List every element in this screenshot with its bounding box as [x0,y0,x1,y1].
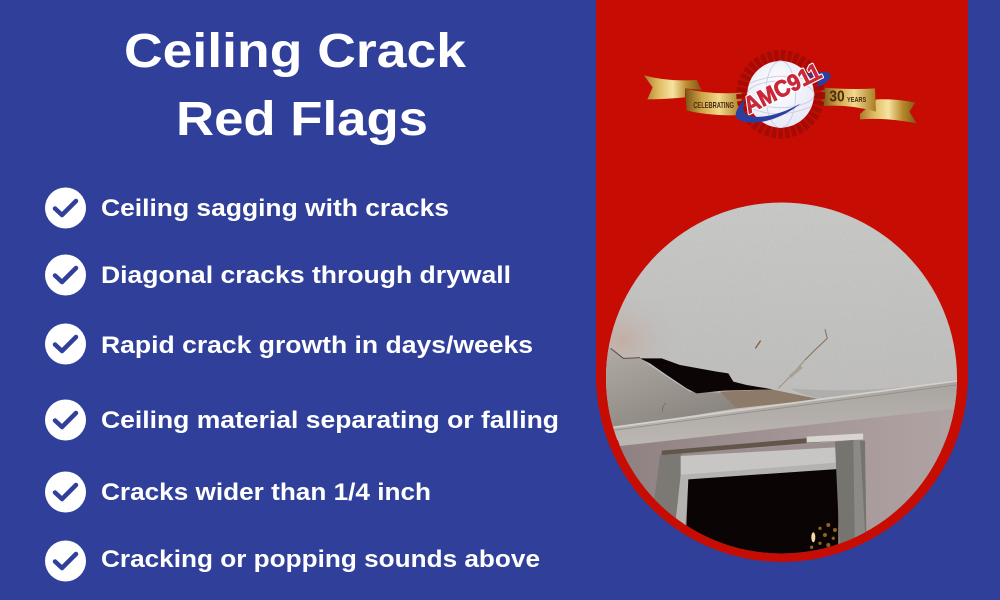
item: diagonal cracks: Diagonal cracks through drywall [101,262,511,289]
item: wider cracks: Cracks wider than 1/4 inch [101,479,431,506]
item: rapid growth [45,324,533,364]
title [124,25,466,146]
crown molding [613,382,958,446]
item: material separating [45,400,559,440]
dark window pane [685,469,838,560]
item: material separating: Ceiling material separating or falling [101,407,559,434]
fallen ceiling section [600,347,737,430]
window blind top rail [662,433,863,455]
right ribbon [822,87,917,123]
wordmark: AMC911 [739,58,825,118]
right ribbon: 30 [829,88,845,105]
globe [747,61,814,128]
item: popping sounds: Cracking or popping sounds above [101,546,540,573]
window shade [681,447,836,475]
seal rays [743,57,818,132]
title: Ceiling Crack [124,25,466,78]
ceiling [600,200,965,440]
logo: AMC911 30 years [644,57,917,132]
item: ceiling sagging: Ceiling sagging with cracks [101,195,449,222]
chandelier reflection [810,523,837,549]
wordmark: AMC911 [739,58,825,118]
orbit swoosh [736,72,831,123]
right ribbon: YEARS [847,95,866,104]
checklist [45,188,559,582]
left ribbon [644,75,742,115]
item: popping sounds [45,540,540,582]
hole [640,358,773,393]
window blind right [835,440,867,553]
ceiling shadow near molding [720,389,820,408]
item: diagonal cracks [45,254,511,296]
item: rapid growth: Rapid crack growth in days/weeks [101,332,533,359]
hairline cracks [611,329,827,412]
plaster grain [600,200,965,440]
left ribbon: CELEBRATING [693,100,734,110]
warm tint on ceiling [607,308,652,358]
photo: cracked ceiling [606,202,957,554]
window frame [676,462,836,525]
wall [619,408,954,554]
panel: red banner [596,0,968,562]
window blind left [654,454,682,521]
item: wider cracks [45,472,431,512]
item: ceiling sagging [45,188,449,228]
wall strip above shade [681,442,836,456]
title: Red Flags [176,93,428,146]
